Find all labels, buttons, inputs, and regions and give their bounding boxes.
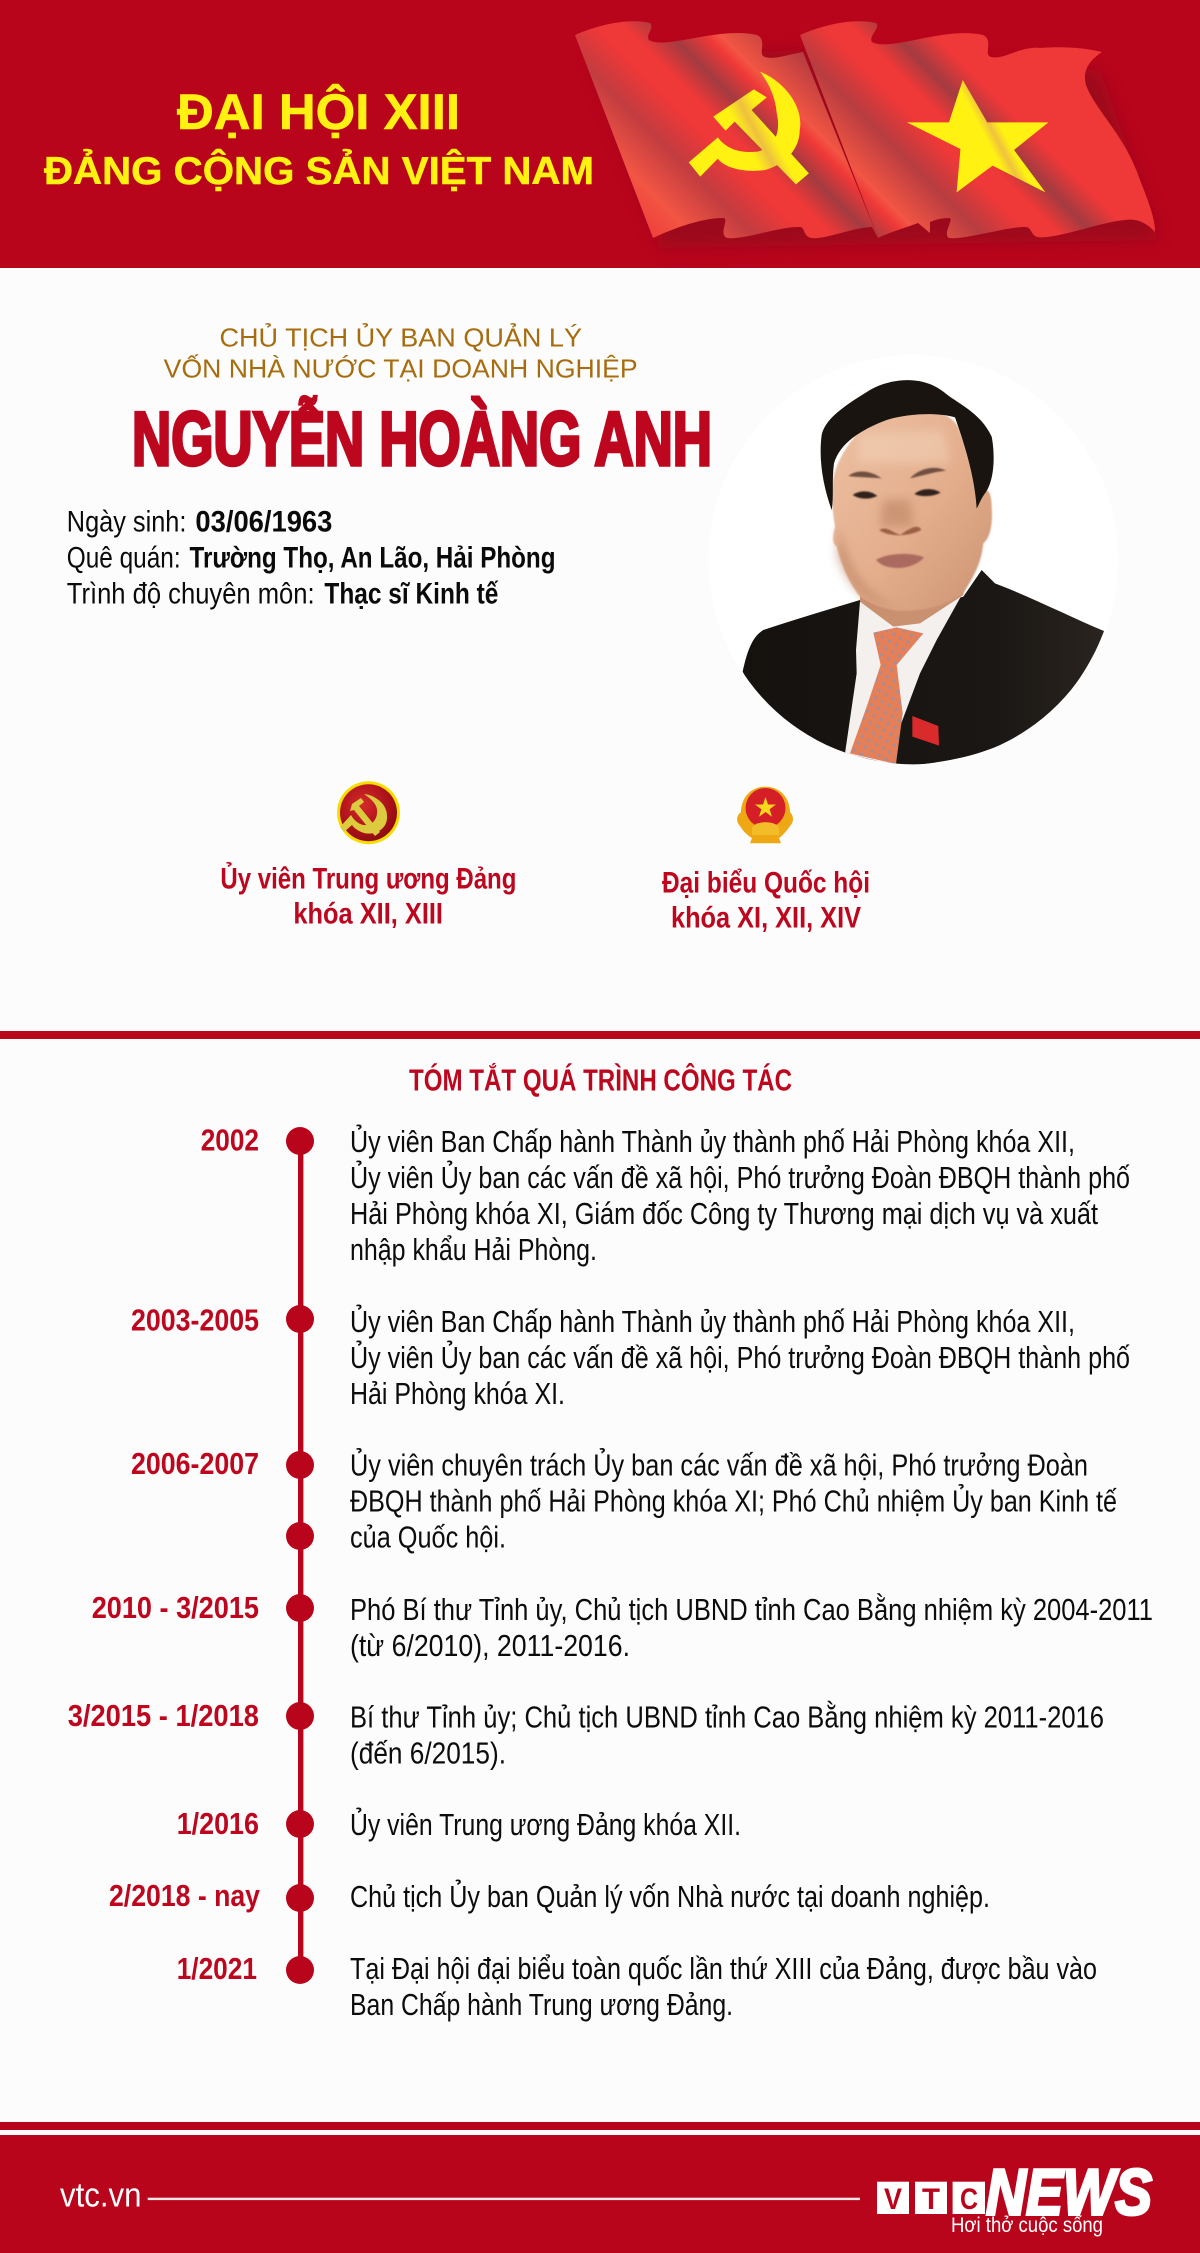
entry 1/2021 (177, 1951, 1097, 2022)
logo: VTC News: Hơi thở cuộc sống (951, 2214, 1103, 2237)
personal details (67, 506, 556, 610)
assembly membership label: khóa XI, XII, XIV (671, 902, 861, 935)
entry 2010 - 3/2015: (từ 6/2010), 2011-2016. (350, 1628, 630, 1663)
entry 2006-2007 (131, 1446, 1117, 1554)
logo: VTC News: C (960, 2183, 978, 2216)
name heading: NGUYỄN HOÀNG ANH (132, 396, 712, 482)
logo: VTC News (877, 2156, 1152, 2237)
entry 3/2015 - 1/2018: 3/2015 - 1/2018 (68, 1698, 259, 1733)
position subtitle (164, 322, 638, 384)
tie (850, 627, 923, 764)
entry 1/2016: Ủy viên Trung ương Đảng khóa XII. (350, 1806, 741, 1842)
icon: party badge (337, 781, 400, 844)
entry 2006-2007: 2006-2007 (131, 1446, 259, 1481)
entry 3/2015 - 1/2018 (68, 1698, 1104, 1771)
entry 2006-2007: của Quốc hội. (350, 1520, 506, 1554)
hair (821, 380, 994, 510)
personal details: Trường Thọ, An Lão, Hải Phòng (190, 542, 556, 575)
timeline axis (286, 1127, 314, 1984)
assembly membership label: Đại biểu Quốc hội (662, 866, 870, 899)
entry 2/2018 - nay: Chủ tịch Ủy ban Quản lý vốn Nhà nước tại doanh nghiệp. (350, 1878, 990, 1914)
party membership label: Ủy viên Trung ương Đảng (220, 861, 516, 895)
entry 1/2016 (177, 1806, 741, 1842)
entry 1/2021: 1/2021 (177, 1951, 257, 1986)
position subtitle: VỐN NHÀ NƯỚC TẠI DOANH NGHIỆP (164, 354, 638, 384)
entry 1/2016: 1/2016 (177, 1806, 259, 1841)
personal details: Ngày sinh: (67, 506, 186, 539)
title (44, 83, 594, 193)
party membership label: khóa XII, XIII (293, 897, 443, 930)
lapel pin (912, 716, 939, 746)
face (832, 411, 992, 611)
entry 2003-2005: 2003-2005 (131, 1303, 259, 1338)
icon: star (907, 80, 1048, 192)
icon: national emblem (737, 787, 793, 843)
entry 1/2021: Ban Chấp hành Trung ương Đảng. (350, 1987, 733, 2022)
title: ĐẢNG CỘNG SẢN VIỆT NAM (44, 148, 594, 193)
icon: waving flags (575, 21, 1160, 248)
entry 3/2015 - 1/2018: (đến 6/2015). (350, 1736, 506, 1771)
logo: VTC News: T (922, 2183, 940, 2216)
entry 2/2018 - nay (109, 1878, 990, 1914)
panel: footer (0, 2135, 1200, 2253)
section heading: TÓM TẮT QUÁ TRÌNH CÔNG TÁC (409, 1062, 792, 1098)
entry 2003-2005: Hải Phòng khóa XI. (350, 1376, 565, 1411)
position subtitle: CHỦ TỊCH ỦY BAN QUẢN LÝ (220, 322, 582, 353)
personal details: Thạc sĩ Kinh tế (324, 577, 499, 610)
portrait (742, 380, 1104, 764)
logo: VTC News: NEWS (986, 2156, 1152, 2228)
site address: vtc.vn (60, 2177, 142, 2215)
personal details: Trình độ chuyên môn: (67, 577, 315, 610)
assembly membership label (662, 866, 870, 935)
entry 2003-2005 (131, 1303, 1130, 1411)
icon: hammer and sickle (689, 72, 809, 184)
personal details: 03/06/1963 (195, 506, 332, 539)
timeline (68, 1123, 1153, 2022)
suit (743, 570, 1104, 765)
facial features (837, 430, 950, 607)
entry 2002: nhập khẩu Hải Phòng. (350, 1232, 597, 1267)
entry 2002 (201, 1123, 1130, 1267)
entry 2010 - 3/2015: 2010 - 3/2015 (92, 1590, 259, 1625)
title: ĐẠI HỘI XIII (177, 83, 460, 140)
entry 2/2018 - nay: 2/2018 - nay (109, 1878, 261, 1913)
shirt (845, 593, 963, 765)
personal details: Quê quán: (67, 542, 181, 575)
entry 2002: 2002 (201, 1123, 259, 1158)
panel: header banner (0, 0, 1200, 268)
entry 2010 - 3/2015 (92, 1590, 1153, 1663)
logo: VTC News: V (884, 2183, 902, 2216)
party membership label (220, 861, 516, 930)
neck (860, 590, 964, 627)
